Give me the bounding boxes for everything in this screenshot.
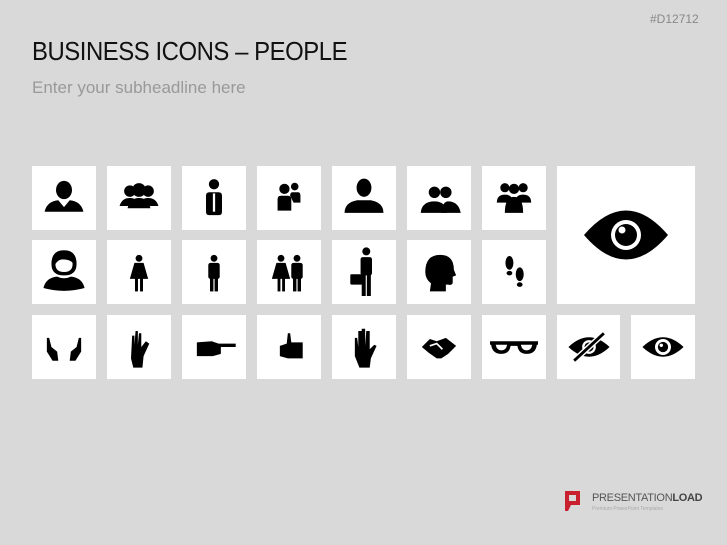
code label: #D12712: [650, 12, 699, 26]
logo: PRESENTATIONLOAD: [592, 492, 702, 504]
icon: raised hand: [332, 315, 396, 379]
icon: two silhouettes: [407, 166, 471, 230]
icon: pointing hand: [182, 315, 246, 379]
icon: businessman: [32, 166, 96, 230]
icon: person with tie: [182, 166, 246, 230]
title: BUSINESS ICONS – PEOPLE: [32, 36, 347, 66]
logo: Premium PowerPoint Templates: [592, 506, 663, 512]
icon: man with briefcase: [332, 240, 396, 304]
icon: man: [182, 240, 246, 304]
icon: big eye: [557, 166, 695, 304]
subheadline: Enter your subheadline here: [32, 78, 246, 97]
icon: user avatar: [32, 240, 96, 304]
icon: two persons: [257, 166, 321, 230]
icon: glasses: [482, 315, 546, 379]
icon: handshake: [407, 315, 471, 379]
icon: silhouette: [332, 166, 396, 230]
icon: thumbs up: [257, 315, 321, 379]
icon: crossed eye: [557, 315, 620, 379]
icon: eye: [631, 315, 695, 379]
icon: team: [482, 166, 546, 230]
icon: couple: [257, 240, 321, 304]
logo: [565, 491, 702, 512]
icon: ok hand: [107, 315, 171, 379]
icon grid: [32, 166, 695, 379]
icon: open hands: [32, 315, 96, 379]
icon: head profile: [407, 240, 471, 304]
icon: footprints: [482, 240, 546, 304]
icon: group: [107, 166, 171, 230]
icon: woman: [107, 240, 171, 304]
